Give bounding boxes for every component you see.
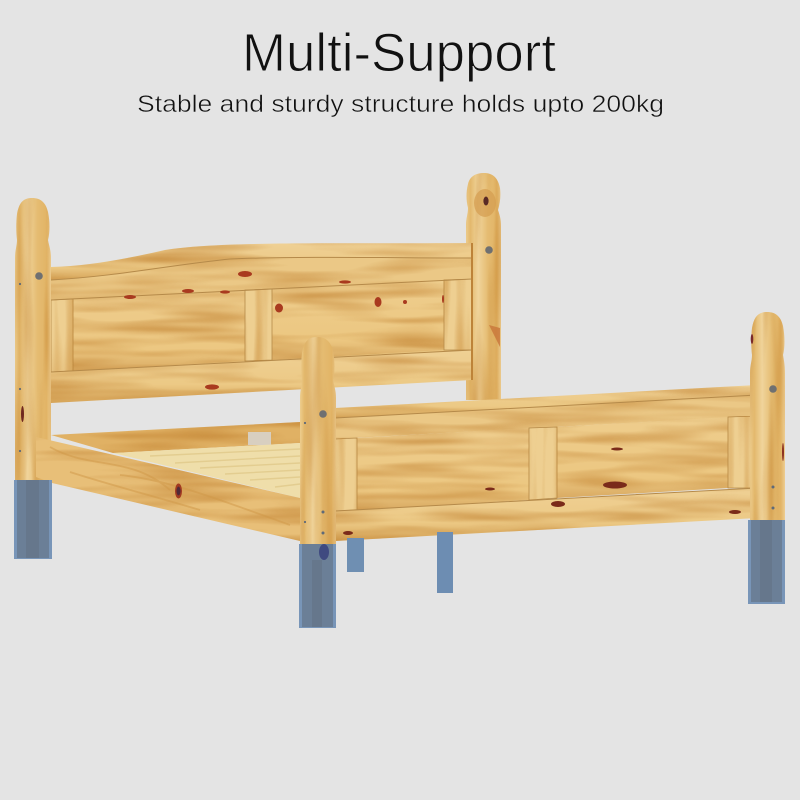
headboard knots: [124, 271, 444, 390]
footboard panels: [357, 428, 529, 510]
back rail and mattress slats: [51, 422, 300, 498]
headboard bottom rail: [51, 350, 472, 403]
side rail: [36, 437, 300, 541]
bed illustration: [14, 173, 785, 628]
footboard top rail: [335, 385, 757, 418]
headboard top rail: [51, 243, 472, 280]
footboard left post: [300, 337, 336, 544]
footboard right post: [750, 312, 785, 520]
leg: front left: [299, 544, 336, 628]
leg: centre support two: [437, 532, 453, 593]
footboard middle rail: [335, 395, 757, 439]
subtitle: Stable and sturdy structure holds upto 200kg: [137, 91, 664, 118]
footboard bottom rail: [335, 488, 757, 541]
leg: centre support one: [347, 538, 364, 572]
headboard panels: [51, 279, 472, 372]
headboard stiles: [51, 279, 472, 372]
leg: front right: [748, 520, 785, 604]
footboard frame: [335, 385, 757, 541]
headboard right post: [466, 173, 501, 400]
footboard stiles: [335, 416, 757, 511]
headboard left post: [15, 198, 51, 480]
title: Multi-Support: [242, 23, 556, 83]
headboard frame: [51, 243, 472, 403]
headboard middle rail: [51, 257, 472, 300]
footboard knots: [343, 448, 741, 535]
leg: back left: [14, 480, 52, 559]
